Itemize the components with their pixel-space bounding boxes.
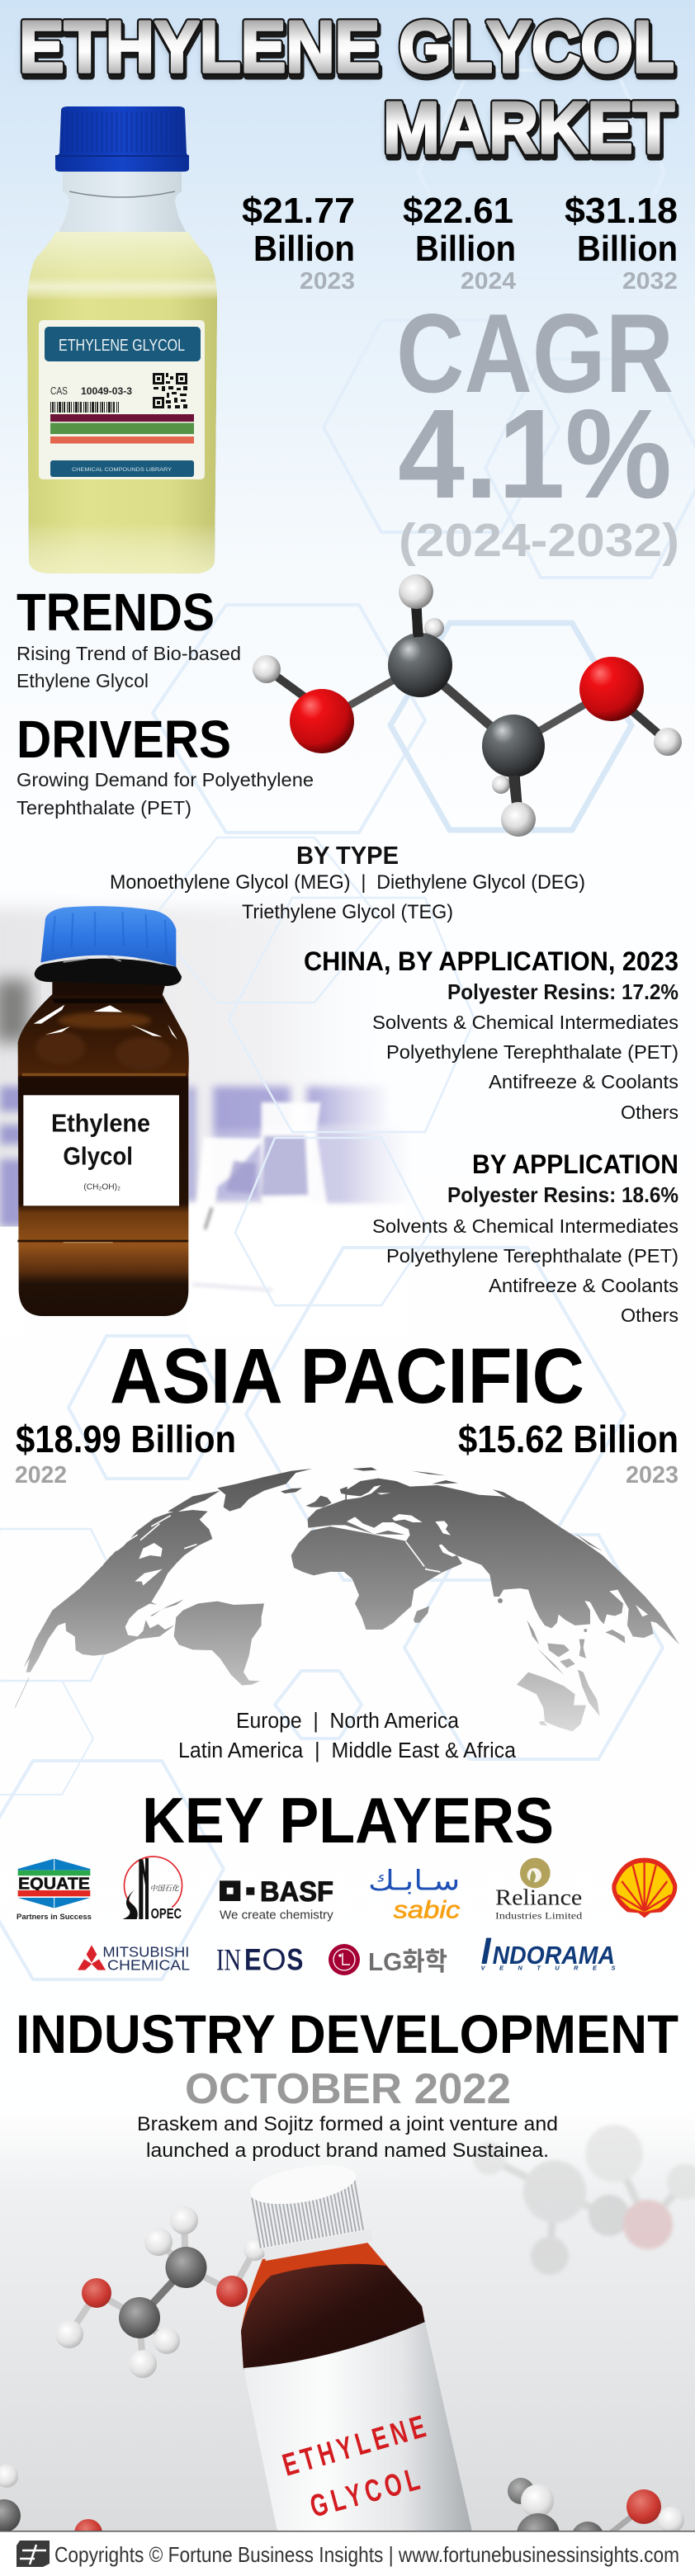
logo: Reliance bbox=[495, 1858, 583, 1921]
logo: Ineos: O bbox=[262, 1943, 286, 1977]
amber bottle reflections bbox=[17, 998, 188, 1243]
illustration: molecule left bbox=[55, 2206, 267, 2378]
icon: Fortune Business Insights logo bbox=[17, 2541, 50, 2567]
value 2024 bbox=[403, 191, 516, 295]
heading: Asia Pacific: ASIA PACIFIC bbox=[110, 1333, 584, 1420]
value 2032 bbox=[565, 191, 678, 295]
bottle liquid bbox=[27, 232, 217, 573]
trends text: Rising Trend of Bio-based bbox=[17, 643, 241, 664]
value 2023 bbox=[242, 191, 355, 295]
red liquid in bottle bbox=[241, 2239, 425, 2370]
panel: by application: Solvents & Chemical Intermediates bbox=[372, 1215, 678, 1237]
amber bottle label bbox=[23, 1095, 179, 1205]
illustration: blurred molecule right bbox=[473, 2125, 695, 2275]
logo: Sinopec: OPEC bbox=[151, 1905, 182, 1922]
panel: by type: Triethylene Glycol (TEG) bbox=[242, 901, 453, 923]
Western Europe and UK bbox=[306, 1487, 349, 1528]
logo: BASF: BASF bbox=[260, 1876, 333, 1908]
illustration: blurred lab background bbox=[0, 908, 410, 1337]
value 2024: Billion bbox=[415, 229, 516, 269]
logo: Sabic: سـابـك bbox=[368, 1865, 460, 1897]
logos: key players bbox=[17, 1857, 677, 1978]
development description bbox=[137, 2113, 558, 2162]
panel: by application: Polyester Resins: 18.6% bbox=[447, 1182, 678, 1207]
logo: Mitsubishi Chemical: CHEMICAL bbox=[107, 1957, 190, 1974]
logo: Indorama Ventures: VENTURES bbox=[481, 1965, 615, 1972]
logo: Mitsubishi Chemical bbox=[78, 1944, 190, 1974]
Asia Pacific value 2023: $15.62 Billion bbox=[458, 1418, 678, 1460]
amber bottle collar bbox=[35, 959, 182, 986]
value 2032: $31.18 bbox=[565, 191, 678, 231]
illustration: white-label bottle bbox=[241, 2158, 472, 2531]
development description: launched a product brand named Sustainea. bbox=[146, 2140, 549, 2162]
logo: LG Chem: LG화학 bbox=[368, 1947, 447, 1976]
blurred cabinets bbox=[0, 1087, 410, 1227]
Arctic and Pacific islands bbox=[352, 1467, 603, 1551]
heading: trends: TRENDS bbox=[17, 583, 215, 642]
inland seas bbox=[347, 1485, 648, 1625]
heading: drivers: DRIVERS bbox=[17, 710, 231, 769]
illustration: yellow liquid bottle bbox=[27, 106, 217, 573]
logo: Indorama Ventures: I bbox=[481, 1930, 492, 1972]
amber bottle label: (CH₂OH)₂ bbox=[83, 1183, 121, 1192]
barcode bbox=[50, 402, 119, 413]
panel: by application: Polyethylene Terephthalate (PET) bbox=[386, 1245, 678, 1267]
floor bbox=[0, 1227, 25, 1337]
date: October 2022: OCTOBER 2022 bbox=[185, 2065, 511, 2113]
Asia Pacific value 2023: 2023 bbox=[626, 1462, 678, 1489]
value 2032: Billion bbox=[577, 229, 678, 269]
panel: by application bbox=[372, 1149, 678, 1326]
bottle label: CHEMICAL COMPOUNDS LIBRARY bbox=[72, 467, 173, 473]
title bbox=[19, 6, 676, 173]
other regions: Latin America | Middle East & Africa bbox=[178, 1739, 517, 1762]
logo: Ineos: S bbox=[286, 1943, 303, 1977]
bottle glass bbox=[27, 172, 217, 573]
logo: Ineos: E bbox=[244, 1943, 262, 1977]
bottle text bbox=[278, 2409, 429, 2524]
trends text: Ethylene Glycol bbox=[17, 670, 149, 691]
South America bbox=[174, 1602, 264, 1686]
bottle body label bbox=[243, 2322, 472, 2531]
other regions bbox=[178, 1710, 517, 1762]
logo: Reliance: Reliance bbox=[495, 1885, 582, 1909]
trends text bbox=[17, 643, 241, 691]
amber bottle label: Glycol bbox=[63, 1143, 133, 1171]
panel: China by application: Polyethylene Terephthalate (PET) bbox=[386, 1041, 678, 1063]
heading: key players: KEY PLAYERS bbox=[142, 1784, 554, 1857]
panel: by type: Monoethylene Glycol (MEG) | Diethylene Glycol (DEG) bbox=[110, 871, 585, 894]
value 2024: 2024 bbox=[461, 268, 516, 295]
logo: Equate bbox=[17, 1859, 92, 1921]
logo: BASF: We create chemistry bbox=[220, 1908, 334, 1922]
logo: Reliance: Industries Limited bbox=[495, 1911, 583, 1921]
blue cap bbox=[40, 906, 176, 967]
logo: Shell bbox=[612, 1858, 677, 1918]
panel: by application: BY APPLICATION bbox=[472, 1149, 678, 1179]
CAGR callout: (2024-2032) bbox=[399, 514, 679, 567]
eastern hemisphere land bbox=[291, 1467, 679, 1731]
panel: China by application: Polyester Resins: 17.2% bbox=[447, 979, 678, 1004]
logo: Mitsubishi Chemical: MITSUBISHI bbox=[102, 1944, 189, 1960]
bottle label: CAS bbox=[50, 385, 68, 397]
drivers text: Terephthalate (PET) bbox=[17, 797, 191, 819]
logo: Indorama Ventures bbox=[481, 1930, 615, 1972]
title line: Market: MARKET bbox=[383, 92, 674, 173]
logo: Sabic: sabic bbox=[394, 1897, 460, 1924]
bottle cap bbox=[55, 106, 189, 172]
bottle cap bbox=[248, 2158, 373, 2262]
drivers text: Growing Demand for Polyethylene bbox=[17, 769, 314, 790]
Asia Pacific value 2022: 2022 bbox=[15, 1462, 67, 1489]
Greenland and Iceland bbox=[217, 1469, 312, 1512]
Cuba bbox=[150, 1599, 184, 1616]
value 2023: $21.77 bbox=[242, 191, 355, 231]
Africa bbox=[291, 1526, 442, 1630]
amber bottle label: Ethylene bbox=[51, 1110, 150, 1138]
footer bbox=[0, 2531, 695, 2576]
logo: Sinopec bbox=[122, 1857, 182, 1922]
title line: Market: MARKET bbox=[385, 91, 676, 172]
bottle label: 10049-03-3 bbox=[81, 385, 132, 397]
logo: Equate: Partners in Success bbox=[17, 1913, 92, 1921]
value 2024: $22.61 bbox=[403, 191, 513, 231]
Asia Pacific value 2022: $18.99 Billion bbox=[16, 1418, 236, 1460]
panel: by application: Antifreeze & Coolants bbox=[489, 1275, 678, 1296]
logo: Indorama Ventures: NDORAMA bbox=[493, 1941, 615, 1970]
Eurasia bbox=[345, 1479, 679, 1644]
QR code bbox=[153, 373, 187, 408]
logo: LG Chem bbox=[329, 1944, 447, 1976]
panel: by type: BY TYPE bbox=[296, 841, 399, 870]
panel: by type bbox=[110, 841, 585, 923]
bottle text: ETHYLENE bbox=[278, 2409, 429, 2483]
blurred flasks bbox=[190, 1102, 330, 1301]
illustration background: grey studio bbox=[0, 2108, 695, 2532]
drivers text bbox=[17, 769, 314, 819]
Australia bbox=[517, 1673, 586, 1731]
panel: China by application: Solvents & Chemical Intermediates bbox=[372, 1012, 678, 1033]
Asia Pacific value 2023 bbox=[458, 1418, 678, 1489]
panel: China by application: Others bbox=[621, 1102, 678, 1123]
development description: Braskem and Sojitz formed a joint venture and bbox=[137, 2113, 558, 2135]
logo: BASF bbox=[220, 1876, 334, 1922]
bottle text: GLYCOL bbox=[306, 2460, 423, 2524]
CAGR callout bbox=[396, 290, 679, 567]
logo: Sinopec: 中国石化 bbox=[150, 1883, 180, 1894]
bottle label: ETHYLENE GLYCOL bbox=[59, 337, 185, 355]
value 2032: 2032 bbox=[622, 268, 678, 295]
market values bbox=[242, 191, 678, 295]
panel: China by application: Antifreeze & Coolants bbox=[489, 1071, 678, 1092]
panel: China by application bbox=[304, 946, 678, 1123]
illustration: amber bottle bbox=[17, 906, 189, 1316]
Asia Pacific value 2022 bbox=[15, 1418, 236, 1489]
title line: Market: MARKET bbox=[383, 87, 674, 168]
background hexagon pattern bbox=[0, 70, 695, 1979]
other regions: Europe | North America bbox=[236, 1710, 460, 1733]
value 2023: Billion bbox=[253, 229, 355, 269]
panel: trends bbox=[17, 583, 241, 691]
world map dome bbox=[15, 1467, 679, 1731]
value 2023: 2023 bbox=[300, 268, 355, 295]
Madagascar bbox=[414, 1606, 429, 1623]
panel: China by application: CHINA, BY APPLICATION, 2023 bbox=[304, 946, 678, 976]
illustration: molecules at bottom edge bbox=[0, 2465, 684, 2556]
amber bottle body bbox=[18, 994, 189, 1316]
logo: Ineos bbox=[216, 1943, 303, 1978]
logo: Sabic bbox=[368, 1865, 460, 1924]
bottle label bbox=[39, 320, 205, 479]
CAGR callout: 4.1% bbox=[398, 383, 672, 525]
title line: Market: MARKET bbox=[383, 87, 674, 168]
panel: drivers bbox=[17, 710, 314, 819]
panel: by application: Others bbox=[621, 1305, 678, 1326]
icon: ethylene glycol molecule bbox=[253, 574, 682, 837]
logo: Equate: EQUATE bbox=[18, 1875, 90, 1894]
logo: Ineos: IN bbox=[216, 1944, 241, 1978]
North America bbox=[23, 1510, 212, 1673]
